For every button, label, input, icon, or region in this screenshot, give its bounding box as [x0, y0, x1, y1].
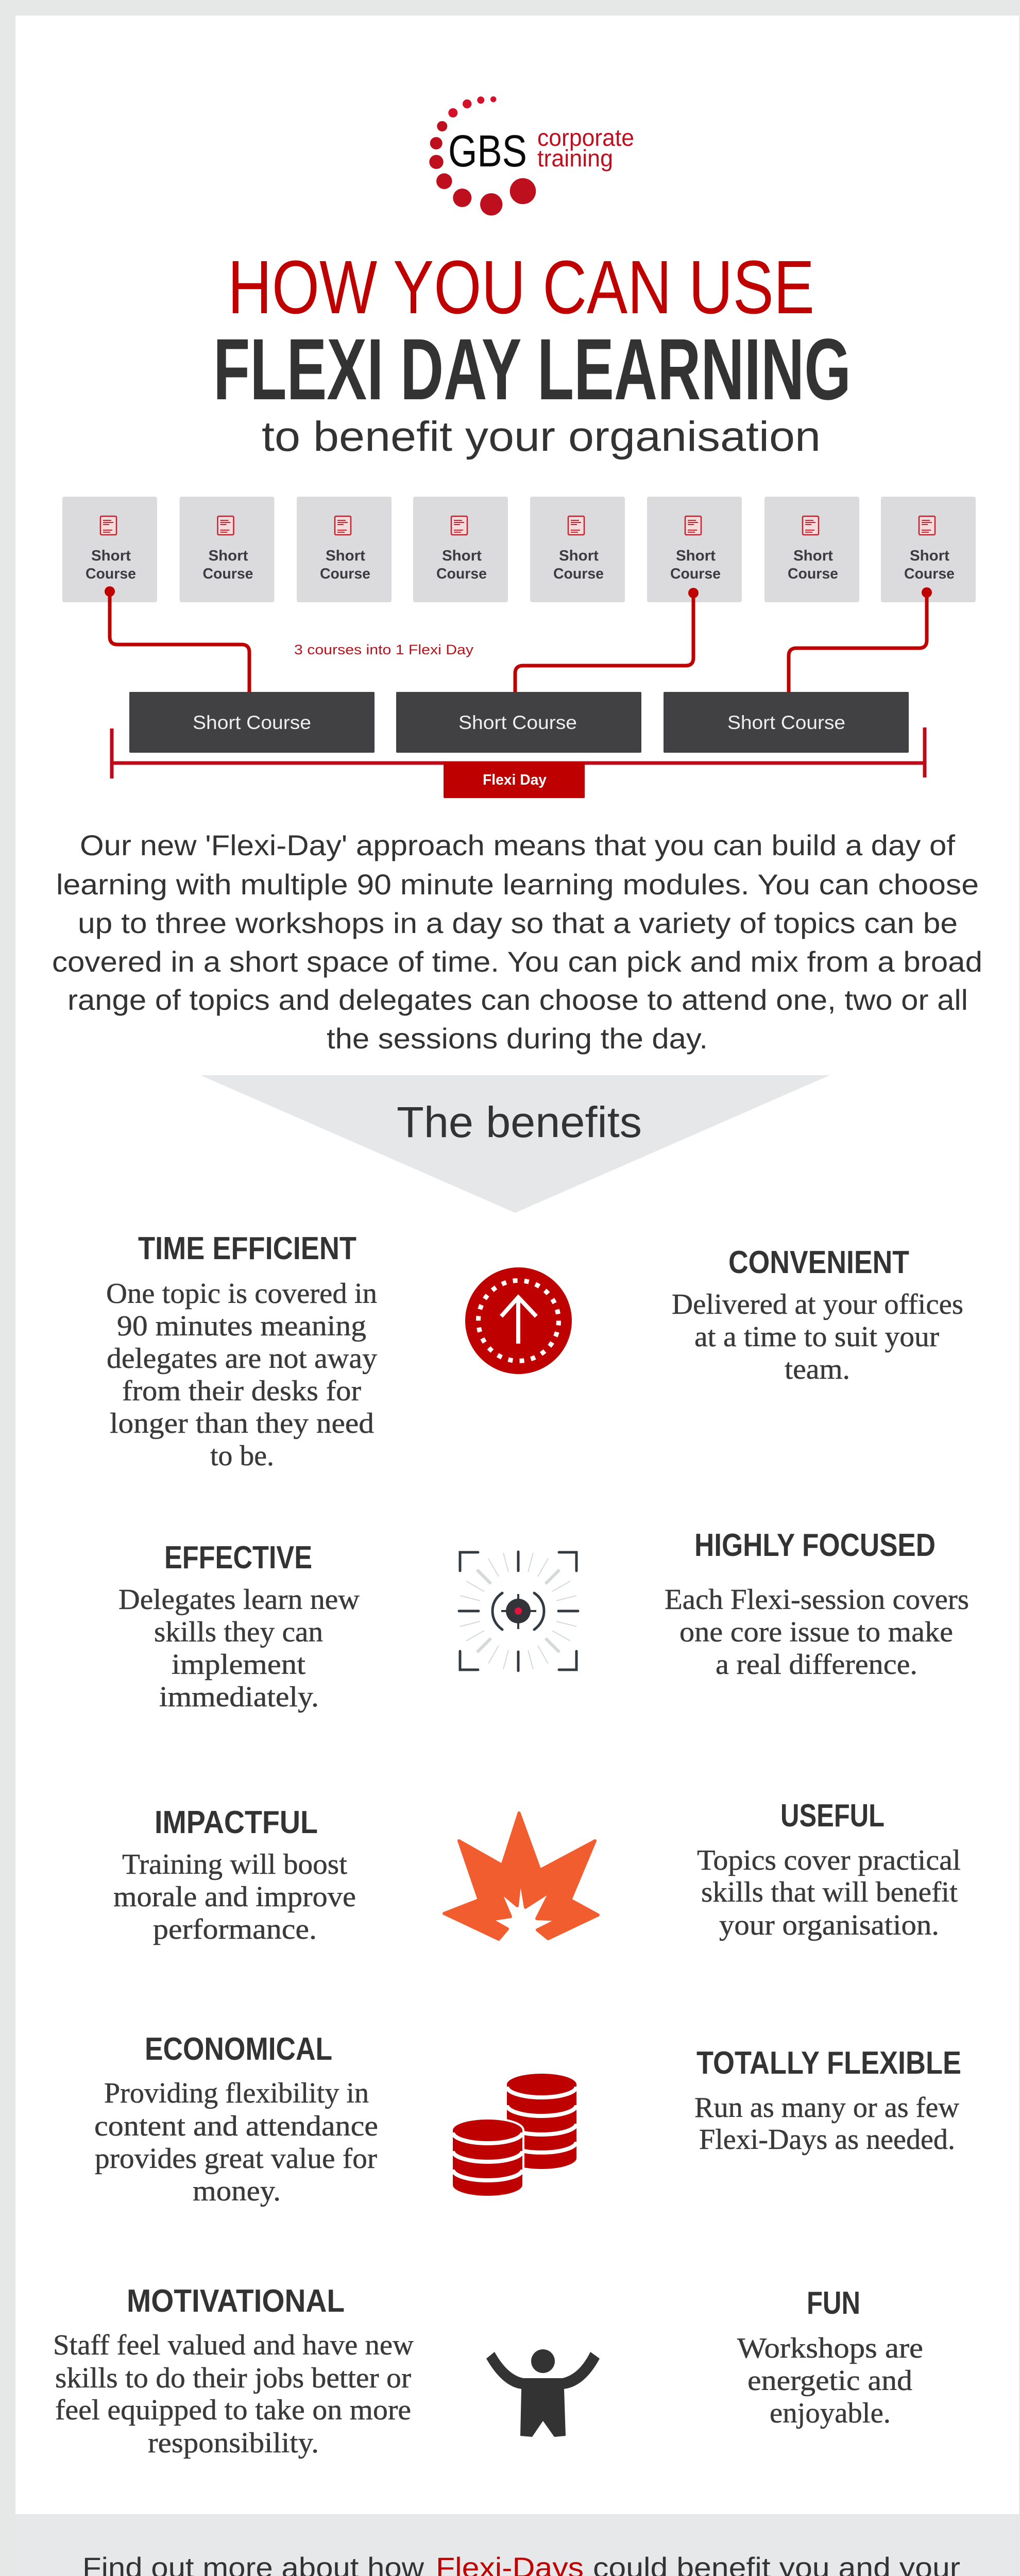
- benefit: time efficient: One topic is covered in: [106, 1278, 377, 1310]
- card 4: [413, 497, 508, 602]
- short course cards row: [62, 497, 976, 602]
- dark course box 1: [129, 692, 375, 753]
- benefit: time efficient: from their desks for: [122, 1375, 361, 1407]
- benefit: effective: implement: [172, 1649, 305, 1681]
- benefit: fun: FUN: [807, 2285, 860, 2321]
- benefit: totally flexible: Run as many or as few: [694, 2092, 960, 2124]
- benefit: economical: content and attendance: [94, 2110, 378, 2142]
- benefit: highly focused: HIGHLY FOCUSED: [694, 1528, 936, 1563]
- intro paragraph: range of topics and delegates can choose to attend one, two or all: [67, 984, 968, 1016]
- card 3: [297, 497, 392, 602]
- intro paragraph: the sessions during the day.: [327, 1022, 708, 1055]
- red connector 3: [789, 587, 932, 692]
- red connector 2: [515, 588, 699, 692]
- diagram: short courses into a flexi day: [62, 497, 976, 798]
- intro paragraph: learning with multiple 90 minute learning modules. You can choose: [56, 868, 979, 901]
- benefit: time efficient: TIME EFFICIENT: [138, 1231, 356, 1266]
- dark course box 3: Short Course: [727, 712, 845, 733]
- benefit: economical: provides great value for: [95, 2143, 377, 2175]
- card 1: Short: [91, 548, 131, 564]
- logo: GBS corporate training: corporate: [537, 124, 634, 151]
- card 1: [62, 497, 157, 602]
- card 7: Course: [788, 566, 838, 582]
- benefit: effective: skills they can: [154, 1616, 323, 1648]
- card 3: Short: [326, 548, 365, 564]
- benefit: economical: [94, 2031, 378, 2207]
- benefit: economical: money.: [193, 2175, 281, 2207]
- benefit: convenient: team.: [785, 1353, 850, 1385]
- intro paragraph: Our new 'Flexi-Day' approach means that you can build a day of: [80, 829, 955, 861]
- benefit: impactful: [113, 1805, 356, 1945]
- benefit: totally flexible: [694, 2045, 961, 2156]
- card 8: Short: [910, 548, 949, 564]
- title line 1: HOW YOU CAN USE: [228, 245, 814, 330]
- benefit: time efficient: [106, 1231, 377, 1472]
- intro paragraph: covered in a short space of time. You can pick and mix from a broad: [52, 945, 982, 978]
- benefit: totally flexible: Flexi-Days as needed.: [699, 2124, 955, 2156]
- benefit: effective: Delegates learn new: [118, 1584, 360, 1616]
- benefit: impactful: Training will boost: [122, 1849, 347, 1880]
- card 6: Short: [676, 548, 716, 564]
- subtitle: to benefit your organisation: [262, 413, 821, 460]
- footer grey arrow band: [15, 2514, 1019, 2576]
- card 5: Course: [553, 566, 604, 582]
- card 4: Course: [436, 566, 487, 582]
- card 8: Course: [904, 566, 955, 582]
- icon: orange explosion: [444, 1813, 598, 1939]
- benefit: convenient: Delivered at your offices: [672, 1289, 963, 1320]
- benefit: time efficient: 90 minutes meaning: [117, 1310, 366, 1342]
- dark course box 2: [396, 692, 641, 753]
- icon: person with raised arms: [486, 2349, 600, 2437]
- card 2: Course: [203, 566, 253, 582]
- card 1: Course: [86, 566, 136, 582]
- benefit: highly focused: [665, 1528, 969, 1681]
- benefit: fun: Workshops are: [737, 2332, 923, 2364]
- benefit: motivational: Staff feel valued and have new: [53, 2329, 414, 2361]
- benefit: effective: immediately.: [159, 1681, 319, 1713]
- dark course box 2: Short Course: [458, 712, 577, 733]
- card 5: Short: [559, 548, 599, 564]
- icon: focus target: [459, 1552, 578, 1671]
- benefit: useful: [697, 1798, 961, 1941]
- intro paragraph: [52, 829, 982, 1055]
- flexi day label: Flexi Day: [483, 772, 547, 788]
- benefits heading triangle: [200, 1075, 830, 1213]
- intro paragraph: up to three workshops in a day so that a variety of topics can be: [78, 907, 958, 939]
- logo: GBS corporate training: [429, 96, 634, 215]
- benefit: useful: skills that will benefit: [701, 1876, 958, 1908]
- benefit: fun: energetic and: [747, 2365, 912, 2397]
- card 2: [179, 497, 274, 602]
- logo: GBS corporate training: training: [537, 145, 613, 172]
- flexi day label: [444, 762, 585, 798]
- benefit: convenient: at a time to suit your: [694, 1321, 939, 1353]
- benefit: economical: Providing flexibility in: [104, 2077, 369, 2109]
- benefit: useful: USEFUL: [780, 1798, 885, 1834]
- benefit: effective: EFFECTIVE: [164, 1540, 312, 1575]
- benefit: economical: ECONOMICAL: [145, 2031, 332, 2067]
- dark course box 1: Short Course: [193, 712, 311, 733]
- flexi day bracket: [112, 727, 925, 778]
- benefit: highly focused: one core issue to make: [679, 1616, 953, 1648]
- benefit: time efficient: to be.: [210, 1440, 274, 1472]
- benefit: impactful: IMPACTFUL: [155, 1805, 318, 1840]
- benefit: impactful: performance.: [153, 1913, 317, 1945]
- benefit: convenient: CONVENIENT: [728, 1245, 909, 1280]
- icon: red dial with up arrow: [465, 1267, 572, 1374]
- benefit: highly focused: Each Flexi-session covers: [665, 1584, 969, 1616]
- red connector 1: [105, 586, 249, 692]
- benefit: motivational: [53, 2283, 414, 2459]
- card 4: Short: [442, 548, 482, 564]
- benefit: useful: Topics cover practical: [697, 1844, 961, 1876]
- card 3: Course: [320, 566, 370, 582]
- benefit: effective: [118, 1540, 360, 1713]
- card 5: [530, 497, 625, 602]
- benefit: time efficient: delegates are not away: [107, 1343, 377, 1375]
- card 7: Short: [793, 548, 833, 564]
- call to action text: [23, 2551, 1018, 2576]
- benefit: totally flexible: TOTALLY FLEXIBLE: [696, 2045, 961, 2081]
- dark course box 3: [664, 692, 909, 753]
- benefit: motivational: skills to do their jobs better or: [55, 2362, 411, 2394]
- benefit: motivational: responsibility.: [148, 2427, 319, 2459]
- icon: coin stacks: [453, 2074, 576, 2196]
- benefit: fun: enjoyable.: [770, 2397, 891, 2429]
- logo: GBS corporate training: GBS: [448, 126, 527, 176]
- card 6: [647, 497, 742, 602]
- card 2: Short: [208, 548, 248, 564]
- card 7: [764, 497, 859, 602]
- diagram caption: 3 courses into 1 Flexi Day: [294, 642, 474, 657]
- benefit: motivational: feel equipped to take on more: [55, 2394, 411, 2426]
- benefits heading triangle: The benefits: [397, 1098, 642, 1146]
- benefit: time efficient: longer than they need: [110, 1408, 374, 1439]
- benefit: useful: your organisation.: [719, 1909, 939, 1941]
- benefit: impactful: morale and improve: [113, 1881, 356, 1913]
- card 8: [881, 497, 976, 602]
- card 6: Course: [670, 566, 721, 582]
- benefit: fun: [737, 2285, 923, 2429]
- benefit: convenient: [672, 1245, 963, 1385]
- benefit: highly focused: a real difference.: [716, 1649, 917, 1681]
- benefit: motivational: MOTIVATIONAL: [127, 2283, 345, 2319]
